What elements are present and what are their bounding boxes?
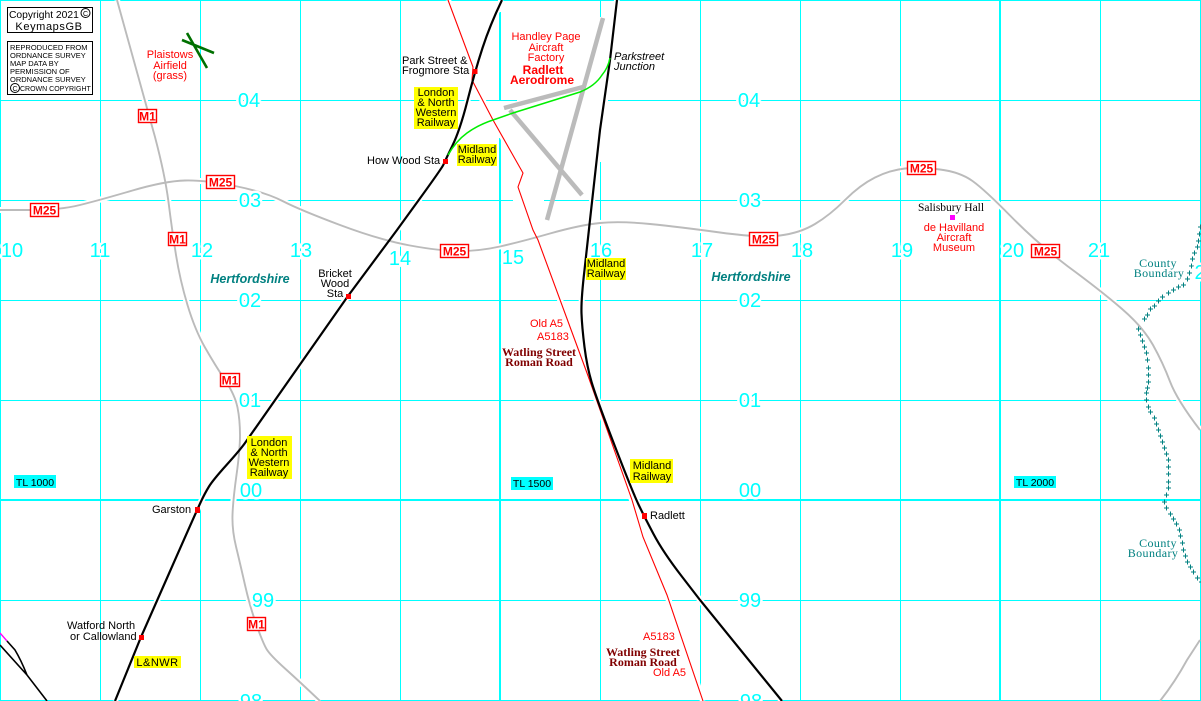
county boundary label north: Boundary — [1134, 266, 1184, 280]
white clearing around aerodrome — [498, 0, 608, 204]
copyright box — [8, 8, 92, 33]
northing numbers: 99 — [252, 590, 274, 612]
M25 shields: M25 — [443, 244, 466, 258]
easting numbers: 12 — [191, 240, 213, 262]
M25 shields: M25 — [1034, 244, 1057, 258]
railway label Midland centre: Railway — [587, 268, 626, 280]
railway label LNWR north: London — [418, 87, 454, 99]
London and North Western Railway line — [115, 0, 502, 701]
railway label LNWR south — [247, 436, 292, 479]
reproduction notice box: MAP DATA BY — [10, 59, 59, 68]
copyright box: KeymapsGB — [15, 21, 83, 33]
railway label Midland centre: Midland — [587, 258, 625, 270]
Salisbury Hall: Salisbury Hall — [918, 202, 984, 214]
M25 shields — [30, 162, 1060, 258]
bottom-left railway — [0, 633, 47, 701]
Bricket Wood station — [318, 268, 352, 300]
reproduction notice box: PERMISSION OF — [10, 67, 70, 76]
reproduction notice box — [8, 42, 92, 94]
Radlett Aerodrome label — [510, 63, 574, 87]
Radlett Aerodrome label: Radlett — [523, 63, 563, 77]
reproduction notice box: C — [12, 86, 18, 93]
Parkstreet Junction label — [613, 51, 665, 73]
M1 shields: M1 — [169, 232, 186, 246]
de Havilland Museum label: Museum — [933, 242, 975, 254]
railway label LNWR south: Railway — [250, 467, 289, 479]
lower Watling Street label: Watling Street — [606, 645, 680, 659]
northing numbers: 00 — [240, 480, 262, 502]
Handley Page label: Aircraft — [529, 42, 563, 54]
railway label Midland at How Wood — [457, 144, 497, 166]
reproduction notice box: ORDNANCE SURVEY — [10, 75, 86, 84]
grid square labels: TL 2000 — [1016, 477, 1054, 489]
easting numbers: 19 — [891, 240, 913, 262]
northing numbers: 01 — [239, 390, 261, 412]
Garston station: Garston — [152, 504, 191, 516]
northing numbers: 02 — [739, 290, 761, 312]
Midland Railway line — [581, 0, 782, 701]
railway label LNWR south: London — [251, 437, 287, 449]
easting numbers: 18 — [791, 240, 813, 262]
county boundary label south: County — [1139, 536, 1177, 550]
copyright box: C — [83, 11, 88, 18]
railway label LNWR north — [414, 87, 458, 129]
Parkstreet Junction label: Junction — [613, 61, 655, 73]
M1 shields: M1 — [248, 618, 265, 632]
railway label LNWR north: Railway — [417, 117, 456, 129]
M1 shields — [138, 110, 266, 632]
old A5 road — [448, 0, 703, 701]
copyright box: Copyright 2021 — [9, 10, 79, 21]
M1 shields: M1 — [222, 374, 239, 388]
railway label Midland south: Railway — [633, 471, 672, 483]
railway label Midland at How Wood: Midland — [458, 144, 496, 156]
easting numbers — [1, 240, 1201, 284]
easting numbers: 11 — [90, 240, 110, 262]
de Havilland Museum label: de Havilland — [924, 222, 984, 234]
northing numbers: 04 — [238, 90, 260, 112]
Plaistows airfield label: Airfield — [153, 60, 187, 72]
upper Watling Street label: Roman Road — [505, 355, 573, 369]
railway label L&NWR: L&NWR — [136, 657, 179, 669]
Bricket Wood station: Sta — [327, 288, 344, 300]
easting numbers: 15 — [502, 247, 524, 269]
easting numbers: 13 — [290, 240, 312, 262]
county boundary label south: Boundary — [1128, 546, 1178, 560]
Radlett Aerodrome label: Aerodrome — [510, 73, 574, 87]
Watford North station: Watford North — [67, 620, 135, 632]
M25 shields: M25 — [209, 176, 232, 190]
M25 shields: M25 — [33, 204, 56, 218]
northing numbers: 03 — [739, 190, 761, 212]
lower Watling Street label: Roman Road — [609, 655, 677, 669]
northing numbers: 03 — [239, 190, 261, 212]
M1 motorway — [117, 0, 320, 701]
Plaistows airfield label: Plaistows — [147, 49, 194, 61]
easting numbers: 16 — [590, 240, 612, 262]
Handley Page label: Handley Page — [511, 31, 581, 43]
Hertfordshire east: Hertfordshire — [711, 270, 791, 284]
Park Street branch line — [448, 58, 610, 155]
railway label LNWR south: Western — [249, 457, 289, 469]
Bricket Wood station: Wood — [321, 278, 349, 290]
northing numbers: 00 — [739, 480, 761, 502]
county boundary label north — [1134, 256, 1184, 280]
Hertfordshire west: Hertfordshire — [210, 272, 290, 286]
Handley Page label — [511, 31, 581, 64]
Plaistows airfield label: (grass) — [153, 70, 187, 82]
lower Watling Street label — [606, 645, 680, 669]
de Havilland Museum label — [924, 222, 984, 254]
lower A5183 label: A5183 — [643, 631, 675, 643]
Watford North station — [67, 620, 144, 643]
reproduction notice box: ORDNANCE SURVEY — [10, 51, 86, 60]
How Wood station: How Wood Sta — [367, 155, 441, 167]
Park Street station: Park Street & — [402, 55, 468, 67]
Handley Page label: Factory — [528, 52, 565, 64]
Salisbury Hall — [918, 202, 984, 220]
Watford North station: or Callowland — [70, 631, 137, 643]
upper A5 labels — [530, 318, 569, 343]
northing numbers: 04 — [738, 90, 760, 112]
railway label Midland at How Wood: Railway — [458, 154, 497, 166]
northing numbers: 01 — [739, 390, 761, 412]
county boundary label south — [1128, 536, 1178, 560]
railway label Midland centre — [586, 258, 626, 280]
reproduction notice box: REPRODUCED FROM — [10, 43, 88, 52]
easting numbers: 17 — [691, 240, 713, 262]
M25 shields: M25 — [752, 232, 775, 246]
Plaistows airfield label — [147, 49, 194, 82]
county boundary label north: County — [1139, 256, 1177, 270]
M25 shields: M25 — [910, 162, 933, 176]
railway label Midland south — [630, 459, 673, 483]
Parkstreet Junction label: Parkstreet — [614, 51, 665, 63]
grid square labels: TL 1500 — [513, 478, 551, 490]
Plaistows airfield runways — [182, 33, 214, 68]
M25 motorway — [0, 168, 1200, 430]
northing numbers: 99 — [739, 590, 761, 612]
railway label LNWR south: & North — [250, 447, 288, 459]
railway label Midland south: Midland — [633, 460, 671, 472]
grid square labels — [14, 475, 1056, 490]
easting numbers: 14 — [389, 248, 411, 270]
Bricket Wood station: Bricket — [318, 268, 352, 280]
easting numbers: 20 — [1002, 240, 1024, 262]
de Havilland Museum label: Aircraft — [937, 232, 971, 244]
easting numbers: 10 — [1, 240, 23, 262]
northing numbers — [238, 90, 762, 701]
county boundary crosses — [1136, 224, 1201, 584]
railway label LNWR north: & North — [417, 97, 455, 109]
upper A5 labels: Old A5 — [530, 318, 563, 330]
upper Watling Street label: Watling Street — [502, 345, 576, 359]
upper Watling Street label — [502, 345, 576, 369]
northing numbers: 02 — [239, 290, 261, 312]
lower Old A5 label: Old A5 — [653, 667, 686, 679]
railway label LNWR north: Western — [416, 107, 456, 119]
M1 shields: M1 — [139, 110, 156, 124]
runways — [504, 18, 603, 220]
south-east road — [1160, 640, 1200, 701]
reproduction notice box: CROWN COPYRIGHT — [20, 86, 92, 93]
Radlett station: Radlett — [650, 510, 685, 522]
upper A5 labels: A5183 — [537, 331, 569, 343]
Park Street station: Frogmore Sta — [402, 65, 470, 77]
grid square labels: TL 1000 — [16, 477, 54, 489]
Park Street station — [402, 55, 478, 77]
easting numbers: 21 — [1088, 240, 1110, 262]
